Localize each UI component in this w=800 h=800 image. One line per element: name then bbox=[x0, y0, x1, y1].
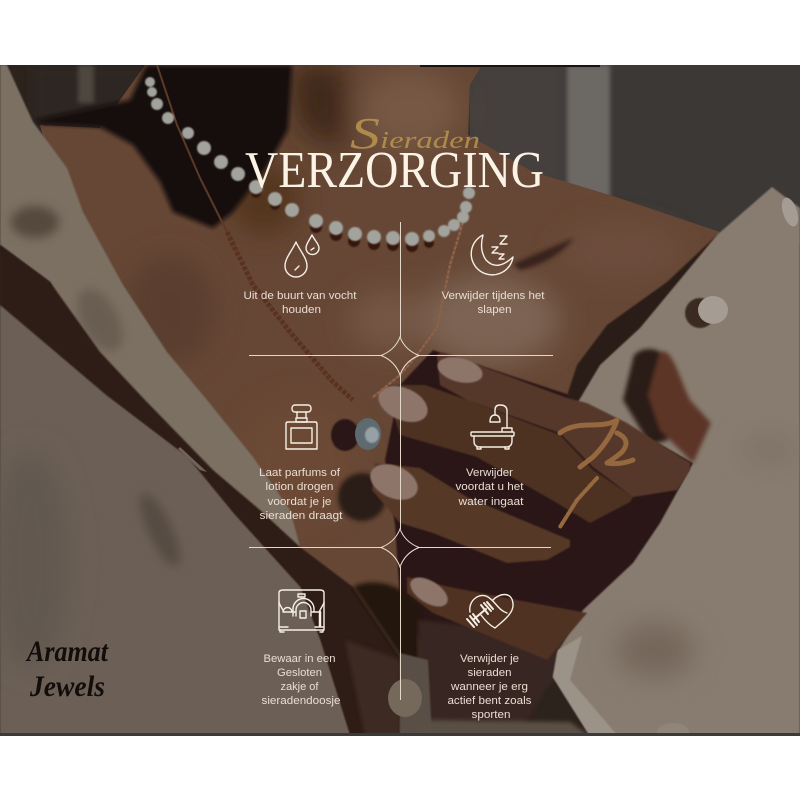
text: sport: wanneer je erg bbox=[450, 681, 528, 693]
neck shadow bbox=[35, 65, 292, 228]
text: storage: zakje of bbox=[280, 681, 319, 693]
left collar band bbox=[0, 65, 300, 547]
text: moisture: houden bbox=[282, 304, 321, 316]
divider star bottom bbox=[381, 529, 419, 567]
thumb bbox=[623, 349, 711, 463]
item: sleep bbox=[441, 235, 548, 316]
text: sleep: Verwijder tijdens het bbox=[441, 290, 544, 302]
skin to shirt shadow bbox=[565, 235, 730, 402]
text: bath: Verwijder bbox=[466, 467, 513, 479]
logo: Jewels bbox=[29, 670, 105, 703]
hand shadows and base bbox=[338, 350, 700, 736]
icon: perfume bottle bbox=[286, 405, 317, 449]
text: sleep: slapen bbox=[478, 304, 512, 316]
text: moisture: Uit de buurt van vocht bbox=[243, 290, 356, 302]
icon: bathtub bbox=[471, 405, 514, 449]
rings bbox=[560, 420, 633, 527]
fingers bbox=[372, 352, 690, 660]
divider star top bbox=[381, 337, 419, 375]
item: storage bbox=[262, 590, 340, 707]
text: perfume: voordat je je bbox=[267, 496, 331, 508]
script heading: S ieraden bbox=[350, 109, 480, 158]
window background bbox=[33, 65, 800, 245]
text: storage: Gesloten bbox=[277, 667, 322, 679]
skin bbox=[40, 65, 720, 736]
text: sport: actief bent zoals bbox=[447, 695, 532, 707]
item: bath bbox=[455, 405, 527, 508]
icon: heart with dumbbell bbox=[467, 594, 513, 628]
text: sport: Verwijder je bbox=[460, 653, 519, 665]
text: bath: voordat u het bbox=[455, 481, 523, 493]
shirt buttons bbox=[388, 196, 800, 741]
lower left shirt bbox=[0, 305, 350, 736]
logo: Aramat bbox=[25, 635, 109, 668]
collar shadow strip bbox=[0, 245, 400, 736]
right shirt bbox=[553, 187, 800, 736]
item: perfume bbox=[259, 405, 343, 522]
text: sport: sporten bbox=[472, 709, 510, 721]
item: moisture bbox=[243, 235, 360, 316]
main title: VERZORGING bbox=[245, 142, 544, 199]
text: perfume: lotion drogen bbox=[265, 481, 333, 493]
logo bbox=[25, 635, 109, 703]
text: storage: Bewaar in een bbox=[263, 653, 335, 665]
fingernails bbox=[365, 353, 485, 612]
pendant bbox=[331, 418, 381, 451]
icon: water drops bbox=[285, 235, 319, 277]
pearl necklace bbox=[145, 77, 475, 252]
text: sport: sieraden bbox=[467, 667, 511, 679]
icon: treasure chest bbox=[279, 590, 324, 632]
text: perfume: Laat parfums of bbox=[259, 467, 341, 479]
text: bath: water ingaat bbox=[457, 496, 524, 508]
heading bbox=[245, 109, 544, 199]
text: storage: sieradendoosje bbox=[262, 695, 340, 707]
chain necklace bbox=[157, 65, 463, 400]
icon: moon with zzz bbox=[471, 235, 513, 275]
text: perfume: sieraden draagt bbox=[260, 510, 342, 522]
item: sport bbox=[447, 594, 535, 721]
